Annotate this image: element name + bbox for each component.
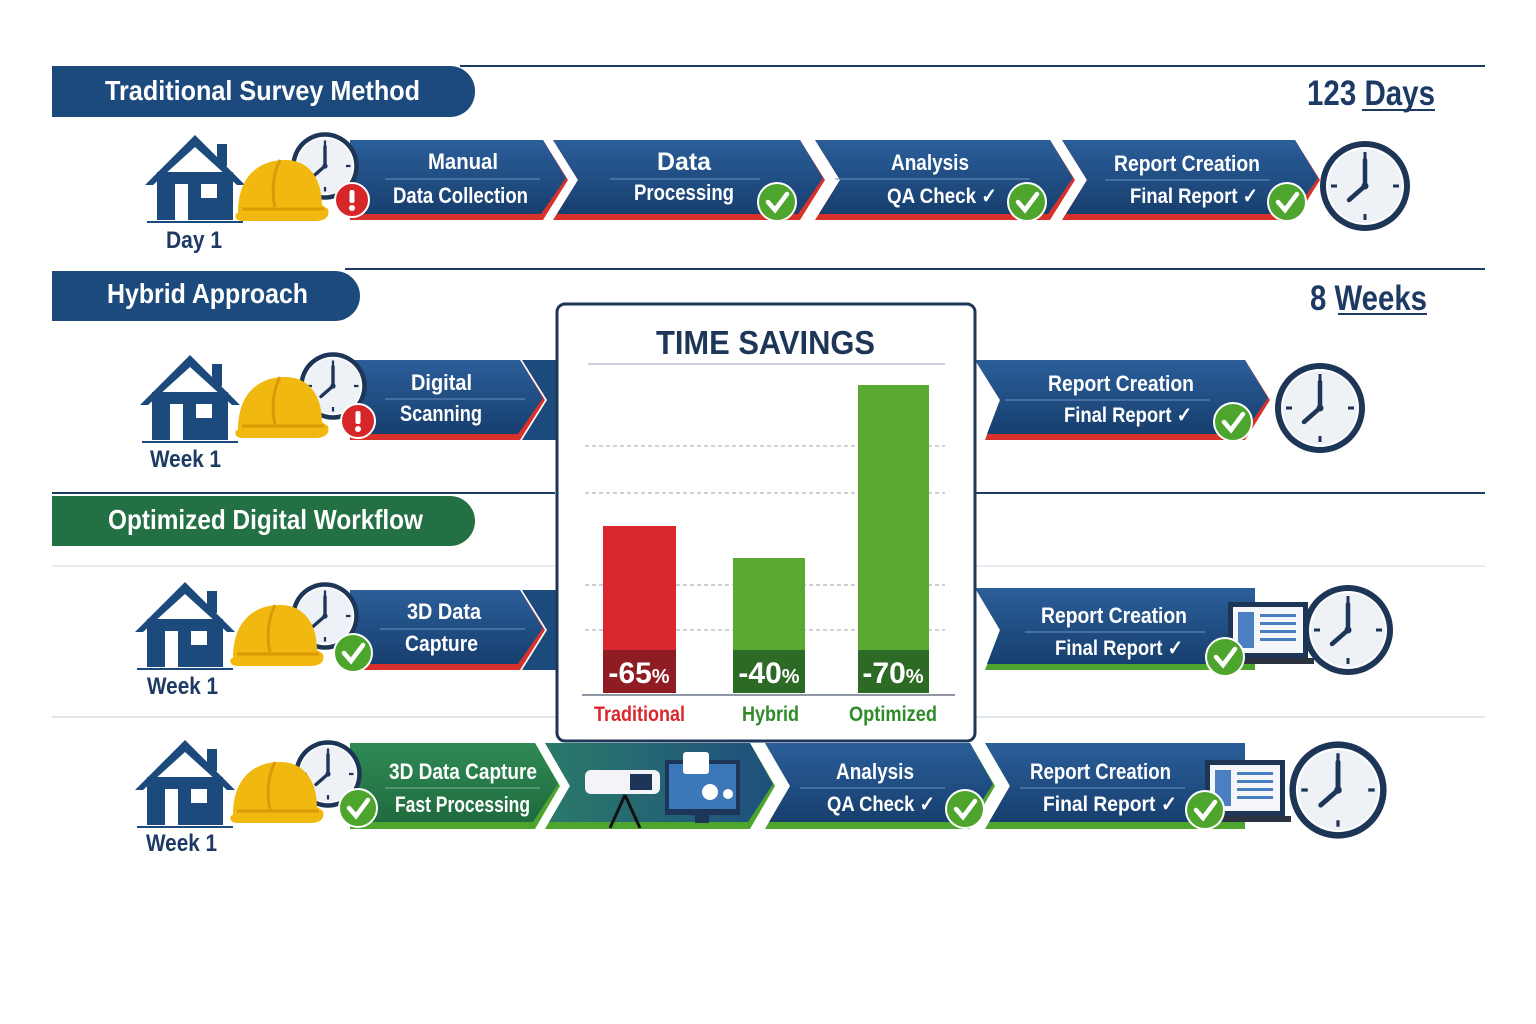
step: digital scanning: [350, 360, 560, 440]
step: 3d data capture: 3D Data: [407, 599, 482, 624]
icon: small clock: [294, 740, 362, 808]
icon: alert: [341, 404, 375, 438]
step: 3d data capture: [350, 590, 560, 670]
icon: small clock: [291, 132, 359, 200]
step: analysis qa check: [765, 743, 995, 829]
icon: clock: [1303, 585, 1393, 675]
step: 3d data capture fast processing: Fast Processing: [395, 792, 530, 817]
step: analysis qa check: Analysis: [836, 759, 914, 784]
header: traditional survey method: Traditional Survey Method: [105, 75, 420, 106]
step: manual data collection: Manual: [428, 149, 498, 174]
step: manual data collection: Data Collection: [393, 183, 528, 208]
bar: hybrid -40%: -40%: [738, 657, 800, 690]
row 1: traditional workflow: [145, 132, 1410, 254]
icon: clock: [1275, 363, 1365, 453]
header: hybrid approach: Hybrid Approach: [107, 278, 308, 309]
step: scanning and processing icons: [545, 743, 775, 829]
icon: small clock: [291, 582, 359, 650]
bar: traditional -65%: [603, 526, 676, 693]
bar: hybrid -40%: [733, 558, 805, 693]
step: digital scanning: Scanning: [400, 401, 482, 426]
step: report creation: Final Report ✓: [1064, 404, 1192, 427]
icon: check: [334, 634, 372, 672]
header: traditional survey method: [52, 66, 1485, 117]
step: analysis qa check: Analysis: [891, 150, 969, 175]
step: analysis qa check: QA Check ✓: [827, 793, 935, 816]
step: report creation: [985, 743, 1245, 829]
axis labels: Optimized: [849, 703, 937, 726]
panel: time savings chart: [557, 304, 975, 741]
row 4: optimized full workflow: [135, 740, 1387, 857]
icon: house: [135, 740, 235, 827]
header: optimized digital workflow: [52, 493, 1485, 546]
icon: helmet: [230, 762, 323, 823]
step: digital scanning: Digital: [411, 370, 472, 395]
step: report creation: [975, 360, 1270, 441]
icon: clock: [1289, 741, 1387, 839]
step: data processing: Data: [657, 148, 712, 176]
step: report creation: Final Report ✓: [1130, 185, 1258, 208]
icon: check: [1206, 638, 1244, 676]
axis labels: Hybrid: [742, 703, 799, 726]
icon: house: [140, 355, 240, 442]
bar: optimized -70%: [858, 385, 929, 693]
label: day 1: Day 1: [166, 227, 222, 254]
bar: optimized -70%: -70%: [862, 657, 924, 690]
step: data processing: [553, 140, 825, 221]
label: week 1: Week 1: [147, 673, 218, 700]
row 3: optimized workflow: [135, 582, 1393, 700]
icon: house: [135, 582, 235, 669]
step: report creation: Report Creation: [1048, 371, 1194, 396]
icon: helmet: [230, 605, 323, 666]
step: report creation: [1062, 140, 1320, 221]
step: report creation: Report Creation: [1041, 603, 1187, 628]
header: hybrid approach: [52, 269, 1485, 321]
step: report creation: [975, 588, 1255, 670]
icon: helmet: [235, 377, 328, 438]
step: report creation: Report Creation: [1030, 759, 1171, 784]
step: report creation: Report Creation: [1114, 151, 1260, 176]
step: manual data collection: [350, 140, 568, 220]
bar: traditional -65%: -65%: [608, 657, 670, 690]
step: 3d data capture fast processing: [350, 743, 560, 829]
step: analysis qa check: QA Check ✓: [887, 185, 997, 208]
icon: clock: [1320, 141, 1410, 231]
step: report creation: Final Report ✓: [1043, 793, 1177, 816]
icon: house: [145, 135, 245, 222]
icon: alert: [335, 183, 369, 217]
step: report creation: Final Report ✓: [1055, 637, 1183, 660]
duration: 8 weeks: 8 Weeks: [1310, 279, 1427, 318]
icon: check: [1186, 791, 1224, 829]
chart title: TIME SAVINGS: [656, 324, 875, 361]
icon: laptop: [1222, 602, 1314, 664]
duration: 123 days: 123 Days: [1307, 74, 1435, 113]
label: week 1: Week 1: [150, 446, 221, 473]
icon: small clock: [299, 352, 367, 420]
label: week 1: Week 1: [146, 830, 217, 857]
axis labels: [594, 703, 937, 726]
header: optimized digital workflow: Optimized Digital Workflow: [108, 504, 423, 535]
icon: helmet: [235, 160, 328, 221]
row 2: hybrid workflow: [140, 352, 1365, 473]
step: data processing: Processing: [634, 180, 734, 205]
icon: check: [339, 789, 377, 827]
axis labels: Traditional: [594, 703, 685, 726]
step: analysis qa check: [815, 140, 1075, 221]
step: 3d data capture fast processing: 3D Data Capture: [389, 759, 537, 784]
icon: laptop: [1199, 760, 1291, 822]
step: 3d data capture: Capture: [405, 631, 478, 656]
